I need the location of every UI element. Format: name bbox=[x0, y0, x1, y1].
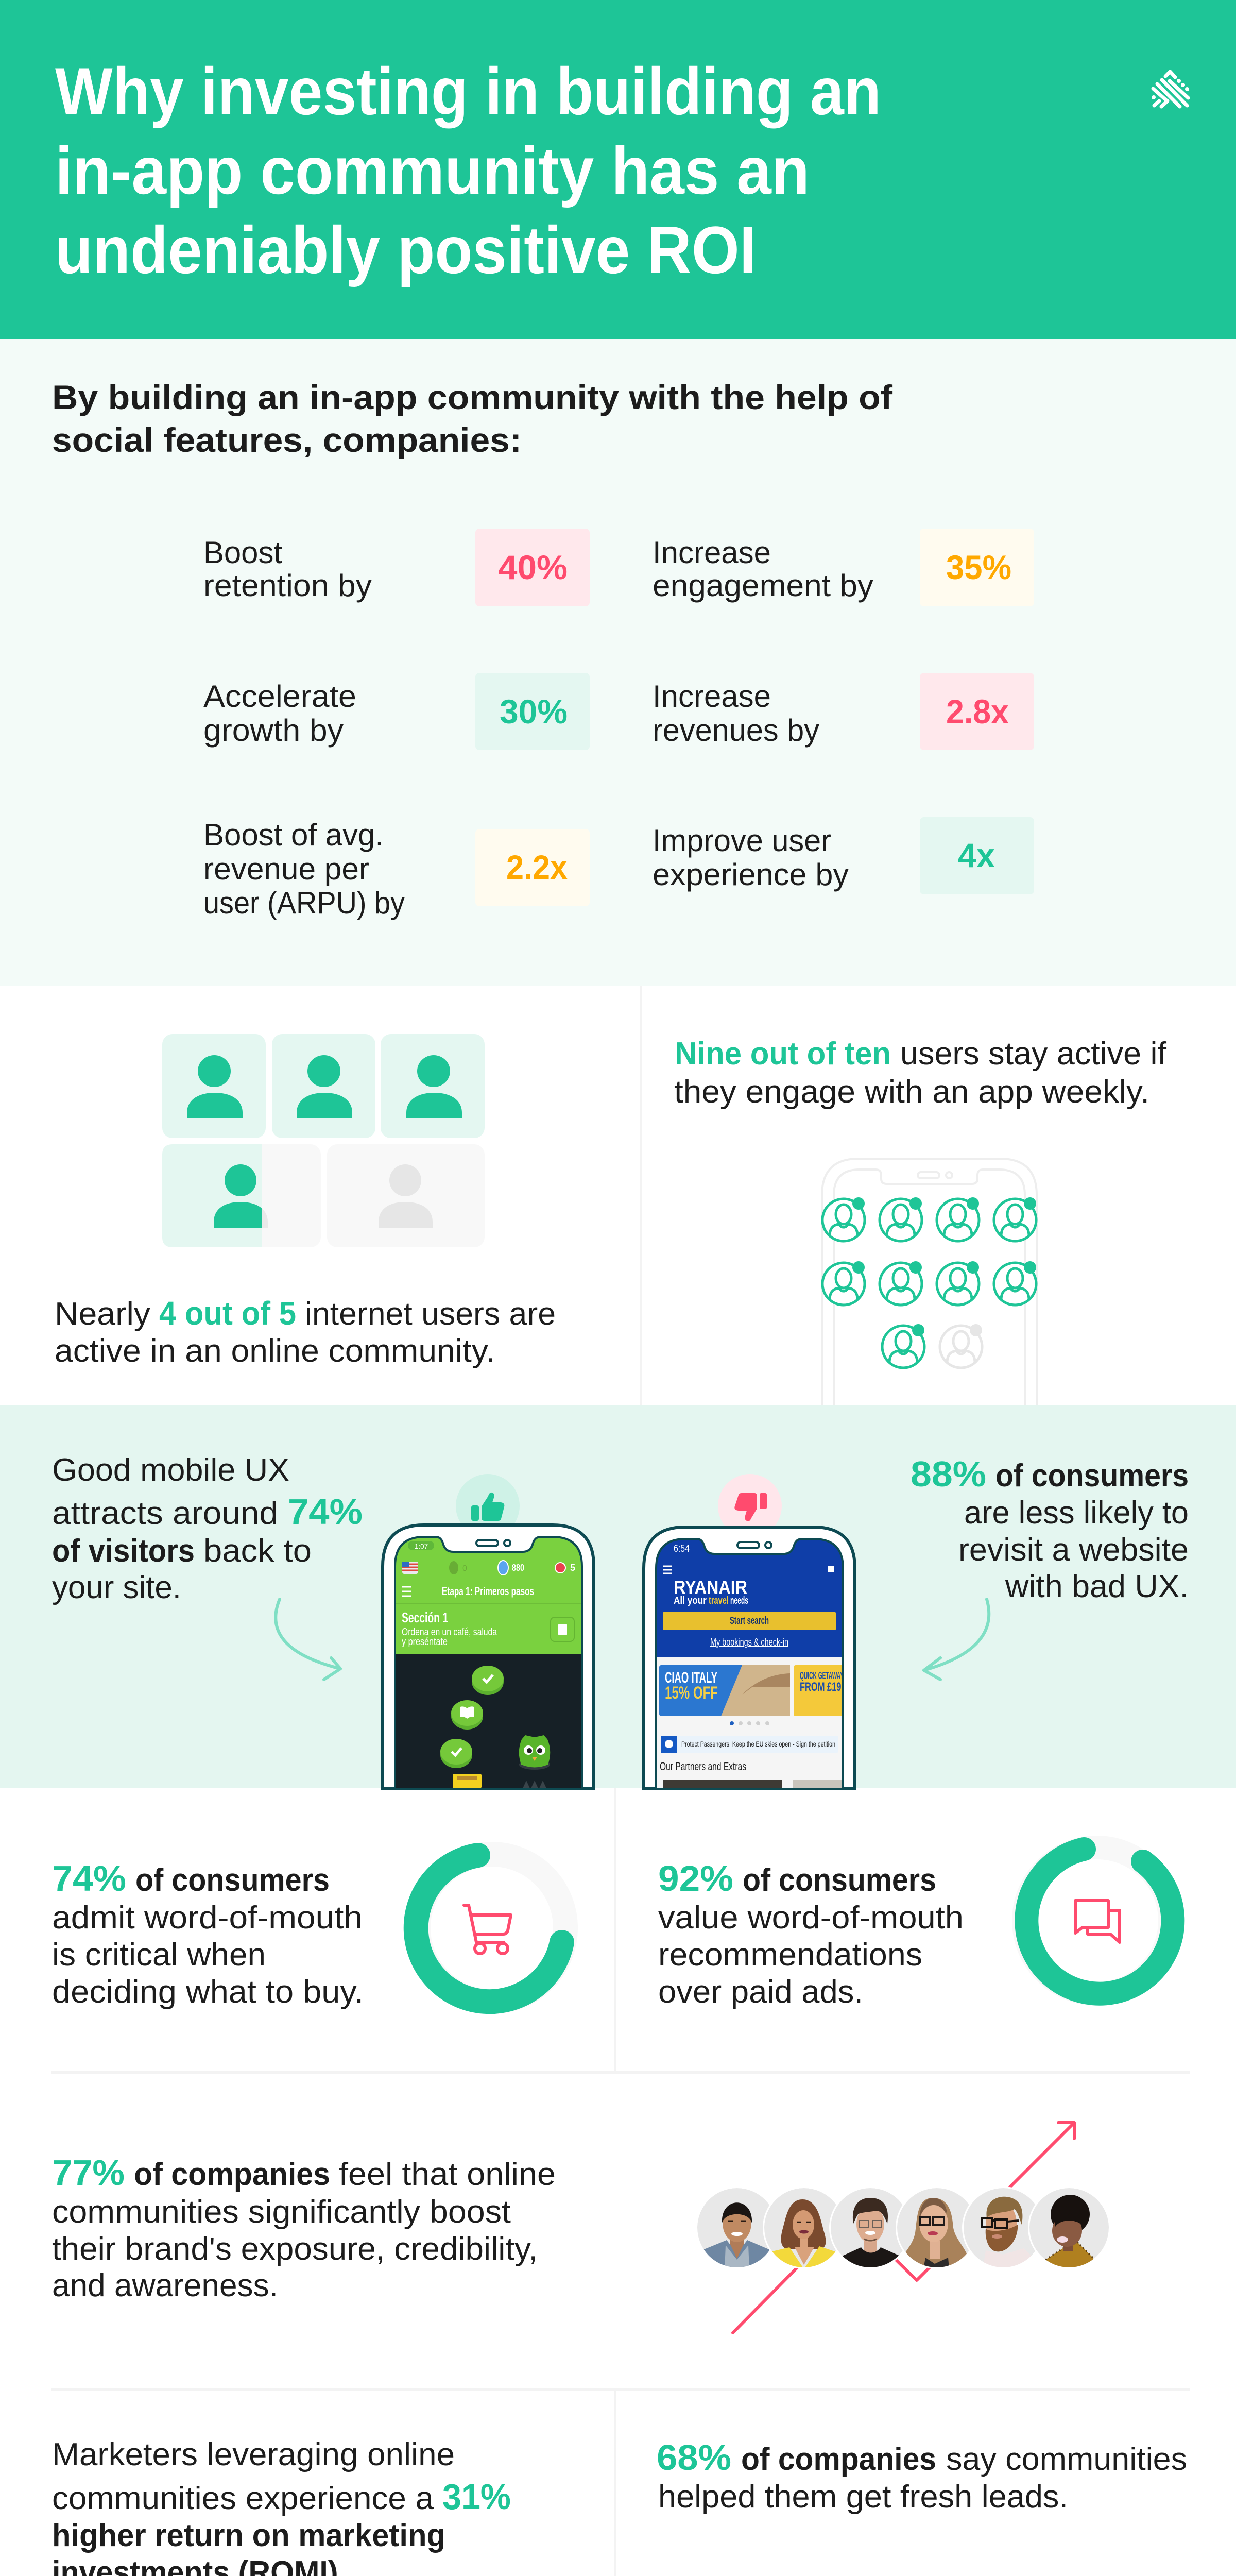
stat: improve experience 4x: experience by bbox=[653, 857, 849, 892]
text: 4 out of 5: active in an online community. bbox=[55, 1333, 495, 1369]
text: 77% of companies: feel that online bbox=[339, 2157, 556, 2192]
stat: accelerate growth 30%: 30% bbox=[500, 692, 568, 731]
heading: benefits intro bbox=[52, 378, 893, 459]
text: 92% of consumers bbox=[658, 1858, 964, 2010]
icon: chat bubbles bbox=[1075, 1901, 1120, 1942]
text: 88% of consumers: are less likely to bbox=[964, 1495, 1189, 1531]
text: 77% of companies: and awareness. bbox=[52, 2268, 278, 2303]
panel: 68% fresh leads bbox=[657, 2437, 1187, 2576]
arrow: to bad phone bbox=[924, 1599, 989, 1680]
heading: benefits intro: social features, companies: bbox=[52, 421, 522, 459]
text: 74% of consumers: is critical when bbox=[52, 1937, 266, 1973]
stat: improve experience 4x: Improve user bbox=[653, 823, 831, 858]
phone: good UX language app: Ordena en un café, saluda bbox=[402, 1626, 497, 1638]
text: nine out of ten: Nine out of ten bbox=[675, 1036, 891, 1072]
text: 68% of companies: helped them get fresh leads. bbox=[658, 2479, 1068, 2515]
phone: bad UX airline app: My bookings & check-in bbox=[710, 1637, 788, 1648]
stat: increase engagement 35% bbox=[653, 529, 1034, 606]
title: undeniably positive ROI bbox=[55, 212, 757, 287]
donut chart: 74% bbox=[416, 1854, 565, 2002]
title: in-app community has an bbox=[55, 133, 810, 208]
text: 88% of consumers bbox=[911, 1454, 1189, 1604]
text: 88% of consumers: of consumers bbox=[995, 1458, 1189, 1494]
text: good mobile UX: back to bbox=[203, 1533, 312, 1569]
text: 4 out of 5: internet users are bbox=[305, 1296, 556, 1332]
phone: good UX language app: 5 bbox=[570, 1563, 575, 1573]
text: 74% of consumers: 74% bbox=[52, 1858, 126, 1899]
panel: 4 out of 5 internet users bbox=[55, 986, 642, 1405]
panel: mobile UX comparison bbox=[0, 1405, 1236, 1788]
text: 92% of consumers: 92% bbox=[658, 1858, 733, 1899]
phone: bad UX airline app: 15% OFF bbox=[665, 1683, 718, 1703]
phone: bad UX airline app: Protect Passengers: Keep the EU skies open - Sign the petition bbox=[681, 1740, 835, 1748]
phone: bad UX airline app: RYANAIR bbox=[674, 1577, 747, 1598]
stat: accelerate growth 30%: Accelerate bbox=[203, 679, 356, 714]
panel: 92% word-of-mouth bbox=[658, 1848, 1173, 2010]
icon: thumbs up bbox=[456, 1474, 520, 1538]
stat: increase engagement 35%: 35% bbox=[946, 548, 1011, 586]
text: 4 out of 5: Nearly bbox=[55, 1296, 150, 1332]
icon: thumbs down bbox=[718, 1474, 782, 1538]
phone: bad UX airline app: Our Partners and Extras bbox=[660, 1760, 746, 1773]
text: 68% of companies: of companies bbox=[741, 2442, 936, 2477]
stat: boost retention 40%: retention by bbox=[203, 568, 372, 603]
text: 77% of companies: 77% bbox=[52, 2153, 125, 2193]
panel: 77% of companies bbox=[52, 2123, 1190, 2391]
text: marketers ROMI: 31% bbox=[442, 2477, 511, 2517]
text: 77% of companies: their brand's exposure, credibility, bbox=[52, 2231, 538, 2267]
phone: good UX language app: 0 bbox=[462, 1564, 467, 1573]
text: marketers ROMI: Marketers leveraging online bbox=[52, 2437, 455, 2472]
text: 68% of companies bbox=[657, 2437, 1187, 2515]
stat: boost ARPU 2.2x: user (ARPU) by bbox=[203, 886, 405, 920]
stat: boost ARPU 2.2x bbox=[203, 818, 590, 920]
phone: bad UX airline app: CIAO ITALY bbox=[665, 1669, 717, 1686]
icon: amity logo mark bbox=[1152, 72, 1189, 107]
panel: company benefits bbox=[0, 339, 1236, 986]
title bbox=[55, 54, 881, 287]
stat: boost ARPU 2.2x: revenue per bbox=[203, 852, 369, 886]
text: 4 out of 5: 4 out of 5 bbox=[159, 1295, 296, 1332]
stat: increase revenues 2.8x: revenues by bbox=[653, 713, 819, 748]
stat: increase engagement 35%: engagement by bbox=[653, 568, 873, 603]
stat: boost retention 40%: 40% bbox=[498, 548, 568, 586]
text: good mobile UX: 74% bbox=[288, 1492, 363, 1532]
phone: good UX language app: 1:07 bbox=[415, 1542, 428, 1550]
panel: 31% ROMI bbox=[50, 2391, 1190, 2576]
text: marketers ROMI: communities experience a bbox=[52, 2481, 434, 2516]
phone: good UX language app: Etapa 1: Primeros pasos bbox=[442, 1585, 534, 1598]
stat: increase revenues 2.8x bbox=[653, 673, 1034, 750]
text: good mobile UX: attracts around bbox=[52, 1496, 278, 1531]
phone: bad UX airline app: 6:54 bbox=[674, 1543, 690, 1554]
panel: nine out of ten users bbox=[674, 1036, 1167, 1405]
phone: bad UX airline app: FROM £19. bbox=[800, 1680, 844, 1694]
text: 74% of consumers bbox=[52, 1858, 364, 2010]
stat: increase engagement 35%: Increase bbox=[653, 535, 771, 570]
stat: improve experience 4x: 4x bbox=[958, 836, 995, 874]
text: marketers ROMI bbox=[52, 2437, 511, 2576]
text: good mobile UX: your site. bbox=[52, 1570, 181, 1605]
stat: boost ARPU 2.2x: Boost of avg. bbox=[203, 818, 384, 852]
icon: shopping cart bbox=[464, 1905, 511, 1954]
phone: good UX language app: y preséntate bbox=[402, 1636, 448, 1648]
text: 77% of companies bbox=[52, 2153, 556, 2303]
text: 92% of consumers: recommendations bbox=[658, 1937, 922, 1973]
arrow: to good phone bbox=[276, 1599, 340, 1680]
phone: good UX language app bbox=[383, 1525, 594, 1788]
phone: good UX language app: Sección 1 bbox=[402, 1609, 448, 1625]
phone: bad UX airline app: Start search bbox=[730, 1615, 769, 1626]
phone: bad UX airline app: QUICK GETAWAY bbox=[800, 1670, 844, 1682]
phone: bad UX airline app: All your bbox=[674, 1595, 707, 1606]
text: good mobile UX bbox=[52, 1452, 363, 1605]
icon grid: people tiles bbox=[162, 1034, 485, 1247]
text: 4 out of 5 bbox=[55, 1295, 556, 1369]
text: nine out of ten: users stay active if bbox=[900, 1036, 1167, 1072]
stat: increase revenues 2.8x: 2.8x bbox=[946, 692, 1009, 731]
text: 92% of consumers: value word-of-mouth bbox=[658, 1900, 964, 1936]
text: 88% of consumers: 88% bbox=[911, 1454, 986, 1494]
text: nine out of ten bbox=[674, 1036, 1167, 1110]
text: 74% of consumers: admit word-of-mouth bbox=[52, 1900, 363, 1936]
phone: bad UX airline app: travel bbox=[709, 1595, 729, 1606]
stat: boost retention 40% bbox=[203, 529, 590, 606]
text: nine out of ten: they engage with an app weekly. bbox=[674, 1074, 1149, 1110]
arrow: upward trend bbox=[733, 2123, 1074, 2333]
phone: bad UX airline app: needs bbox=[730, 1595, 748, 1606]
text: good mobile UX: Good mobile UX bbox=[52, 1452, 289, 1488]
icon group: active users bbox=[822, 1197, 1036, 1368]
phone: bad UX airline app bbox=[644, 1527, 855, 1788]
donut chart: 92% bbox=[1024, 1848, 1173, 1994]
title: Why investing in building an bbox=[55, 54, 881, 129]
text: marketers ROMI: higher return on marketing bbox=[52, 2518, 445, 2553]
stat: accelerate growth 30% bbox=[203, 673, 590, 750]
stat: boost ARPU 2.2x: 2.2x bbox=[506, 848, 568, 886]
stat: boost retention 40%: Boost bbox=[203, 535, 282, 570]
stat: increase revenues 2.8x: Increase bbox=[653, 679, 771, 714]
heading: benefits intro: By building an in-app community with the help of bbox=[52, 378, 893, 416]
text: 74% of consumers: of consumers bbox=[135, 1862, 330, 1898]
header banner bbox=[0, 0, 1236, 339]
text: 77% of companies: of companies bbox=[134, 2157, 330, 2192]
people avatars bbox=[696, 2187, 1110, 2269]
stat: accelerate growth 30%: growth by bbox=[203, 713, 344, 748]
stat: improve experience 4x bbox=[653, 817, 1034, 894]
text: 88% of consumers: revisit a website bbox=[958, 1532, 1189, 1568]
panel: 74% word-of-mouth bbox=[52, 1788, 1190, 2074]
text: 74% of consumers: deciding what to buy. bbox=[52, 1974, 364, 2010]
text: good mobile UX: of visitors bbox=[52, 1533, 195, 1569]
phone: good UX language app: 880 bbox=[512, 1563, 524, 1573]
text: 68% of companies: say communities bbox=[946, 2442, 1187, 2477]
phone outline bbox=[822, 1159, 1037, 1405]
text: 92% of consumers: of consumers bbox=[743, 1862, 936, 1898]
text: 68% of companies: 68% bbox=[657, 2437, 731, 2478]
text: 92% of consumers: over paid ads. bbox=[658, 1974, 863, 2010]
text: 77% of companies: communities significantly boost bbox=[52, 2194, 511, 2230]
text: 88% of consumers: with bad UX. bbox=[1005, 1569, 1189, 1604]
